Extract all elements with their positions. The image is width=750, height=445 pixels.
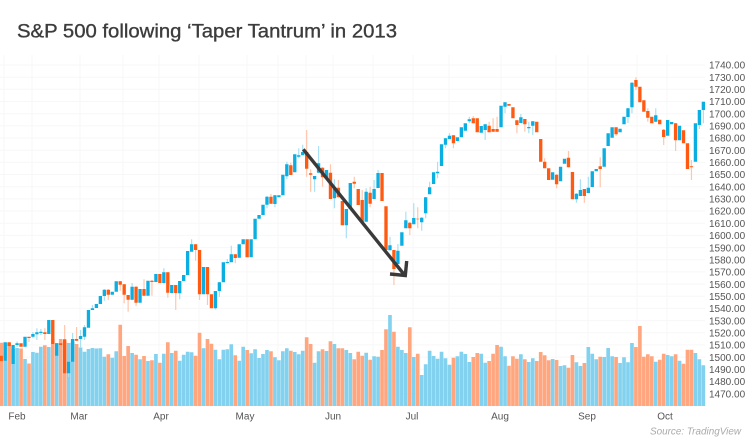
y-axis price labels: 1660.00: [709, 158, 746, 169]
y-axis price labels: 1650.00: [709, 170, 746, 181]
y-axis price labels: 1610.00: [709, 219, 746, 230]
y-axis price labels: 1480.00: [709, 377, 746, 388]
x-axis month labels: Oct: [657, 412, 673, 422]
x-axis month labels: Jul: [406, 412, 418, 422]
title: S&P 500 following ‘Taper Tantrum’ in 2013: [17, 20, 397, 42]
x-axis month labels: [8, 412, 673, 422]
x-axis month labels: Apr: [153, 412, 169, 422]
x-axis month labels: Sep: [578, 412, 596, 422]
y-axis price labels: 1500.00: [709, 353, 746, 364]
source note: Source: TradingView: [650, 426, 742, 438]
y-axis price labels: 1560.00: [709, 280, 746, 291]
y-axis price labels: 1700.00: [709, 109, 746, 120]
y-axis price labels: 1590.00: [709, 243, 746, 254]
candlestick chart: [1, 77, 703, 377]
y-axis price labels: 1670.00: [709, 146, 746, 157]
y-axis price labels: 1580.00: [709, 255, 746, 266]
x-axis month labels: Jun: [325, 412, 341, 422]
y-axis price labels: 1510.00: [709, 341, 746, 352]
y-axis price labels: 1690.00: [709, 122, 746, 132]
y-axis price labels: 1470.00: [709, 389, 746, 400]
y-axis price labels: 1740.00: [709, 61, 746, 72]
y-axis price labels: 1530.00: [709, 316, 746, 327]
x-axis month labels: Aug: [491, 412, 509, 422]
y-axis price labels: 1630.00: [709, 195, 746, 206]
y-axis price labels: 1730.00: [709, 73, 746, 84]
y-axis price labels: [709, 61, 746, 400]
arrow: downtrend after taper announcement: [303, 149, 407, 276]
x-axis month labels: Feb: [8, 412, 26, 422]
y-axis price labels: 1520.00: [709, 328, 746, 340]
y-axis price labels: 1490.00: [709, 365, 746, 376]
y-axis price labels: 1640.00: [709, 182, 746, 193]
x-axis month labels: Mar: [70, 412, 88, 422]
volume bars: [1, 315, 703, 406]
y-axis price labels: 1540.00: [709, 304, 746, 315]
y-axis price labels: 1710.00: [709, 97, 746, 108]
y-axis price labels: 1550.00: [709, 292, 746, 303]
y-axis price labels: 1570.00: [709, 268, 746, 279]
y-axis price labels: 1600.00: [709, 231, 746, 242]
y-axis price labels: 1620.00: [709, 207, 746, 218]
x-axis month labels: May: [236, 412, 254, 422]
y-axis price labels: 1680.00: [709, 134, 746, 145]
y-axis price labels: 1720.00: [709, 85, 746, 96]
